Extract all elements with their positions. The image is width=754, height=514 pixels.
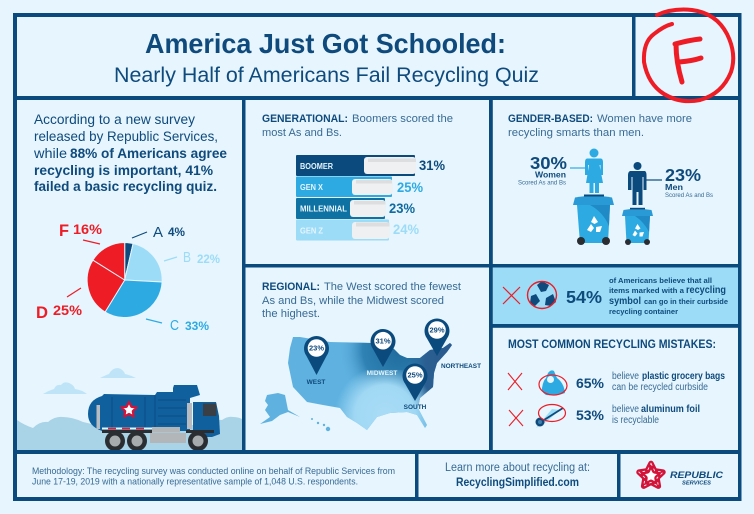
description: symbol bbox=[609, 296, 641, 307]
panel: most common mistakes bbox=[508, 337, 725, 428]
footer: Republic Services logo: SERVICES bbox=[682, 480, 711, 486]
label: F 16%: F bbox=[59, 221, 69, 240]
description: items marked with a bbox=[609, 286, 685, 295]
panel: survey intro: failed a basic recycling quiz. bbox=[34, 178, 217, 194]
wheels bbox=[105, 431, 208, 451]
panel: survey intro: recycling is important, 41% bbox=[34, 162, 214, 178]
heading text line 2: As and Bs, while the Midwest scored bbox=[262, 295, 444, 307]
description: recycling bbox=[686, 285, 726, 296]
description: recycling container bbox=[609, 307, 678, 316]
pin: South: SOUTH bbox=[404, 404, 427, 411]
item: plastic bags: 65% bbox=[576, 376, 604, 392]
cab window bbox=[203, 404, 216, 416]
panel: regional bbox=[260, 281, 481, 440]
bar: Gen X: GEN X bbox=[300, 183, 324, 192]
item: aluminum foil: 53% bbox=[576, 408, 604, 424]
heading: MOST COMMON RECYCLING MISTAKES: bbox=[508, 337, 716, 351]
title bbox=[114, 28, 539, 87]
contiguous states bbox=[288, 337, 452, 430]
item: plastic bags: can be recycled curbside bbox=[612, 382, 708, 393]
heading text: REGIONAL: bbox=[262, 281, 320, 293]
footer: methodology bbox=[32, 466, 395, 486]
item: plastic bags: believe bbox=[612, 371, 639, 382]
pin: Midwest bbox=[367, 329, 397, 377]
heading text: The West scored the fewest bbox=[324, 281, 461, 293]
label: A 4%: 4% bbox=[168, 225, 185, 239]
heading text: GENERATIONAL: bbox=[262, 113, 348, 125]
label: D 25%: 25% bbox=[53, 302, 83, 318]
heading text: GENDER-BASED: bbox=[508, 113, 593, 125]
heading text line 2: most As and Bs. bbox=[262, 127, 342, 139]
pin: Midwest: 31% bbox=[375, 336, 391, 345]
illustration: truck scene bbox=[17, 368, 242, 451]
truck details bbox=[112, 395, 186, 428]
footer: learn more: Learn more about recycling at: bbox=[445, 462, 590, 474]
label: A 4%: A bbox=[153, 224, 163, 241]
pin: West: WEST bbox=[307, 379, 325, 386]
label: F 16% bbox=[59, 221, 103, 244]
item: aluminum foil: is recyclable bbox=[612, 415, 659, 426]
pie chart: grades bbox=[36, 221, 220, 334]
label: B 22%: 22% bbox=[197, 252, 220, 266]
truck cab bbox=[193, 402, 220, 437]
heading text line 2: recycling smarts than men. bbox=[508, 127, 644, 139]
bar: Gen Z: GEN Z bbox=[300, 226, 323, 236]
description: can go in their curbside bbox=[644, 297, 728, 306]
label: D 25%: D bbox=[36, 303, 48, 322]
pin: Midwest: MIDWEST bbox=[367, 370, 397, 377]
label: B 22% bbox=[164, 249, 220, 266]
truck logo bbox=[121, 402, 137, 416]
description bbox=[609, 276, 728, 316]
stat: 54% bbox=[566, 287, 602, 307]
men stat bbox=[646, 165, 713, 199]
pin: Northeast bbox=[424, 318, 481, 370]
item: aluminum foil: aluminum foil bbox=[641, 404, 700, 415]
pin: Northeast: 29% bbox=[429, 326, 445, 335]
men stat: 23% bbox=[665, 165, 701, 185]
slices bbox=[87, 242, 162, 318]
panel: generational bbox=[262, 113, 453, 240]
callout: 54% recycling symbol bbox=[503, 276, 728, 316]
panel: blue recycling symbol band bbox=[493, 267, 738, 324]
footer: learn more: RecyclingSimplified.com bbox=[456, 475, 579, 489]
footer: learn more bbox=[445, 462, 590, 489]
bar: Gen Z bbox=[296, 220, 419, 240]
bar: Boomer bbox=[296, 155, 445, 176]
panel: gender-based bbox=[508, 113, 713, 245]
icon: circled recycling symbol bbox=[528, 281, 556, 308]
bar: Gen X: 25% bbox=[397, 180, 423, 195]
description: of Americans believe that all bbox=[609, 276, 712, 285]
label: D 25% bbox=[36, 288, 83, 322]
label: F 16%: 16% bbox=[73, 221, 103, 237]
garbage truck bbox=[88, 385, 220, 451]
intro text: According to a new survey bbox=[34, 111, 195, 127]
clouds bbox=[43, 368, 136, 394]
label: C 33%: 33% bbox=[185, 319, 209, 333]
pin: South: 25% bbox=[407, 371, 423, 380]
label: B 22%: B bbox=[183, 249, 191, 266]
icon: man on small bin bbox=[622, 162, 653, 245]
footer: methodology: June 17-19, 2019 with a nationally representative sample of 1,048 U.S. respondents. bbox=[32, 476, 358, 486]
main heading: America Just Got Schooled: bbox=[145, 28, 506, 59]
pin: West: 23% bbox=[309, 344, 324, 353]
subtitle: Nearly Half of Americans Fail Recycling Quiz bbox=[114, 63, 539, 87]
item: aluminum foil bbox=[509, 404, 700, 428]
pin: West bbox=[304, 336, 329, 386]
panel: survey intro bbox=[33, 111, 227, 194]
women stat bbox=[518, 153, 586, 186]
hills bbox=[17, 417, 242, 450]
panel: survey intro: 88% of Americans agree bbox=[70, 145, 227, 161]
footer: methodology: Methodology: The recycling survey was conducted online on behalf of Republic Services from bbox=[32, 466, 395, 476]
heading text line 3: the highest. bbox=[262, 308, 320, 320]
bar: Millennial bbox=[296, 198, 415, 219]
icon: red F grade bbox=[644, 10, 733, 101]
truck body bbox=[88, 392, 190, 431]
heading text: Boomers scored the bbox=[352, 113, 453, 125]
bar: Gen X bbox=[296, 176, 423, 197]
pin: South bbox=[402, 363, 427, 411]
label: C 33%: C bbox=[170, 317, 179, 334]
label: A 4% bbox=[132, 224, 185, 241]
icon: red X bbox=[503, 287, 520, 304]
women stat: 30% bbox=[530, 153, 567, 173]
pin: Northeast: NORTHEAST bbox=[441, 363, 481, 370]
footer: Republic Services logo: REPUBLIC bbox=[670, 470, 723, 481]
item: plastic bags: plastic grocery bags bbox=[642, 371, 725, 382]
men stat: Men bbox=[665, 183, 683, 192]
women stat: Women bbox=[535, 170, 566, 180]
label: C 33% bbox=[146, 317, 209, 334]
heading text: Women have more bbox=[597, 113, 692, 125]
item: plastic bags bbox=[508, 370, 725, 396]
panel: survey intro: released by Republic Services, bbox=[34, 128, 218, 144]
item: aluminum foil: believe bbox=[612, 404, 639, 415]
footer: Republic Services logo bbox=[639, 463, 723, 486]
US map bbox=[260, 318, 481, 440]
women stat: Scored As and Bs bbox=[518, 180, 566, 186]
bar: Gen Z: 24% bbox=[393, 222, 419, 237]
panel: survey intro: while bbox=[33, 145, 67, 161]
Alaska and Hawaii bbox=[260, 393, 330, 431]
bar: Millennial: 23% bbox=[389, 201, 415, 216]
bar: Boomer: 31% bbox=[419, 158, 445, 173]
men stat: Scored As and Bs bbox=[665, 193, 713, 199]
bar: Millennial: MILLENNIAL bbox=[300, 204, 347, 214]
bar: Boomer: BOOMER bbox=[300, 162, 333, 171]
icon: woman on large bin bbox=[573, 148, 614, 245]
book bar chart bbox=[296, 155, 445, 240]
